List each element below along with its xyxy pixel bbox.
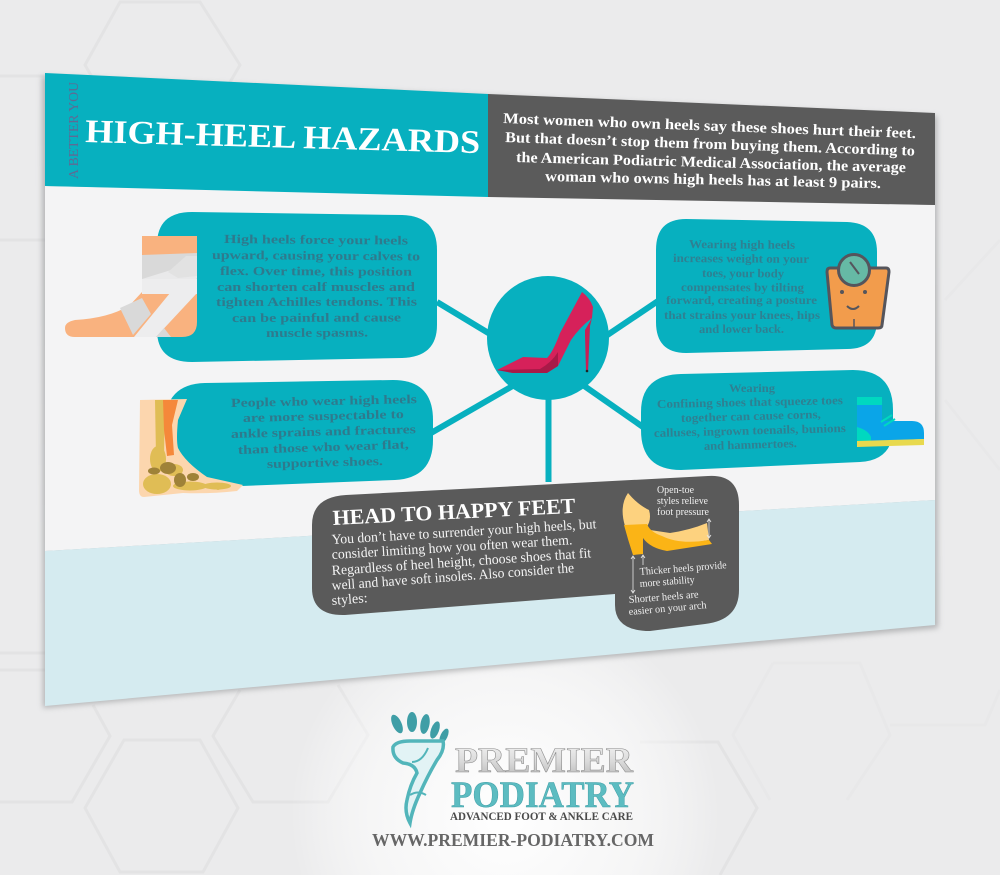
callout: open-toe: foot pressure bbox=[657, 507, 709, 518]
posture text block: that strains your knees, hips bbox=[664, 308, 820, 322]
callout: thicker heels bbox=[639, 560, 727, 590]
logo wordmark: PREMIER: PREMIER bbox=[455, 740, 634, 780]
panel: confining shoes bbox=[641, 370, 924, 470]
calf text block bbox=[212, 232, 420, 340]
logo tagline: ADVANCED FOOT & ANKLE CARE bbox=[450, 809, 633, 823]
confining shoes text block: calluses, ingrown toenails, bunions bbox=[654, 421, 846, 440]
panel: ankle sprains bbox=[139, 380, 433, 497]
confining shoes text block: and hammertoes. bbox=[704, 436, 797, 453]
icon: blue boot bbox=[857, 397, 924, 447]
icon: bandaged foot bbox=[65, 236, 197, 337]
icon: red stiletto bbox=[497, 292, 593, 373]
panel: poster board bbox=[45, 186, 935, 706]
website: WWW.PREMIER-PODIATRY.COM bbox=[372, 830, 654, 850]
callout: shorter heels: easier on your arch bbox=[628, 600, 708, 618]
diagram arrows bbox=[631, 519, 711, 593]
calf text block: upward, causing your calves to bbox=[212, 248, 420, 263]
advice text block: consider limiting how you often wear them. bbox=[331, 533, 573, 563]
panel: calf muscles bbox=[65, 212, 437, 362]
posture text block: increases weight on your bbox=[673, 251, 810, 266]
confining shoes text block: Wearing bbox=[729, 381, 775, 395]
advice text block bbox=[331, 517, 597, 609]
ankle text block: People who wear high heels bbox=[231, 392, 417, 410]
posture text block: Wearing high heels bbox=[689, 237, 795, 252]
logo: Premier Podiatry bbox=[372, 712, 654, 850]
calf text block: High heels force your heels bbox=[224, 232, 408, 248]
advice text block: styles: bbox=[331, 591, 368, 609]
calf text block: can shorten calf muscles and bbox=[217, 280, 415, 294]
logo wordmark: PODIATRY: PODIATRY bbox=[451, 775, 634, 816]
callout: open-toe: Open-toe bbox=[657, 485, 694, 496]
confining shoes text block: Confining shoes that squeeze toes bbox=[657, 393, 843, 411]
ankle text block: ankle sprains and fractures bbox=[231, 422, 416, 441]
posture text block: toes, your body bbox=[702, 266, 784, 280]
icon: foot skeleton bbox=[139, 399, 243, 497]
callout: open-toe bbox=[657, 485, 709, 518]
panel: intro text bbox=[488, 94, 935, 205]
calf text block: flex. Over time, this position bbox=[220, 264, 412, 279]
callout: shorter heels: Shorter heels are bbox=[628, 590, 699, 606]
ankle text block: supportive shoes. bbox=[267, 454, 383, 471]
ankle text block: are more suspectable to bbox=[243, 407, 404, 425]
callout: thicker heels: more stability bbox=[639, 575, 696, 590]
intro line 2: But that doesn’t stop them from buying them. According to bbox=[505, 130, 915, 160]
ankle text block bbox=[231, 392, 417, 471]
connector lines bbox=[431, 301, 658, 482]
callout: shorter heels bbox=[628, 590, 708, 618]
advice text block: Regardless of heel height, choose shoes that fit bbox=[331, 546, 592, 579]
panel: title banner bbox=[45, 73, 488, 197]
calf text block: muscle spasms. bbox=[266, 325, 368, 340]
ankle text block: than those who wear flat, bbox=[238, 437, 409, 457]
calf text block: can be painful and cause bbox=[232, 310, 402, 325]
intro line 4: woman who owns high heels has at least 9 pairs. bbox=[545, 169, 881, 192]
callout: thicker heels: Thicker heels provide bbox=[639, 560, 727, 578]
panel: head to happy feet bbox=[312, 476, 739, 631]
title: HIGH-HEEL HAZARDS bbox=[85, 114, 481, 161]
icon: foot with leaves bbox=[389, 712, 451, 823]
kicker: A BETTER YOU: A BETTER YOU bbox=[67, 82, 82, 179]
callout: open-toe: styles relieve bbox=[657, 496, 708, 507]
panel: centre shoe bbox=[487, 276, 609, 400]
intro line 1: Most women who own heels say these shoes hurt their feet. bbox=[503, 111, 916, 142]
advice text block: You don’t have to surrender your high heels, but bbox=[331, 517, 597, 548]
advice text block: well and have soft insoles. Also consider the bbox=[331, 561, 575, 594]
board shadow bbox=[42, 76, 938, 708]
posture text block: and lower back. bbox=[699, 322, 784, 336]
posture text block: compensates by tilting bbox=[681, 280, 804, 294]
confining shoes text block bbox=[654, 381, 846, 453]
panel: posture bbox=[656, 219, 889, 353]
icon: yellow shoe diagram bbox=[623, 493, 712, 555]
posture text block: forward, creating a posture bbox=[666, 293, 818, 307]
confining shoes text block: together can cause corns, bbox=[681, 407, 821, 425]
icon: smiling scale bbox=[827, 254, 889, 328]
calf text block: tighten Achilles tendons. This bbox=[216, 295, 417, 309]
heading: HEAD TO HAPPY FEET bbox=[332, 494, 577, 530]
posture text block bbox=[664, 237, 820, 336]
intro line 3: the American Podiatric Medical Association, the average bbox=[516, 150, 907, 176]
